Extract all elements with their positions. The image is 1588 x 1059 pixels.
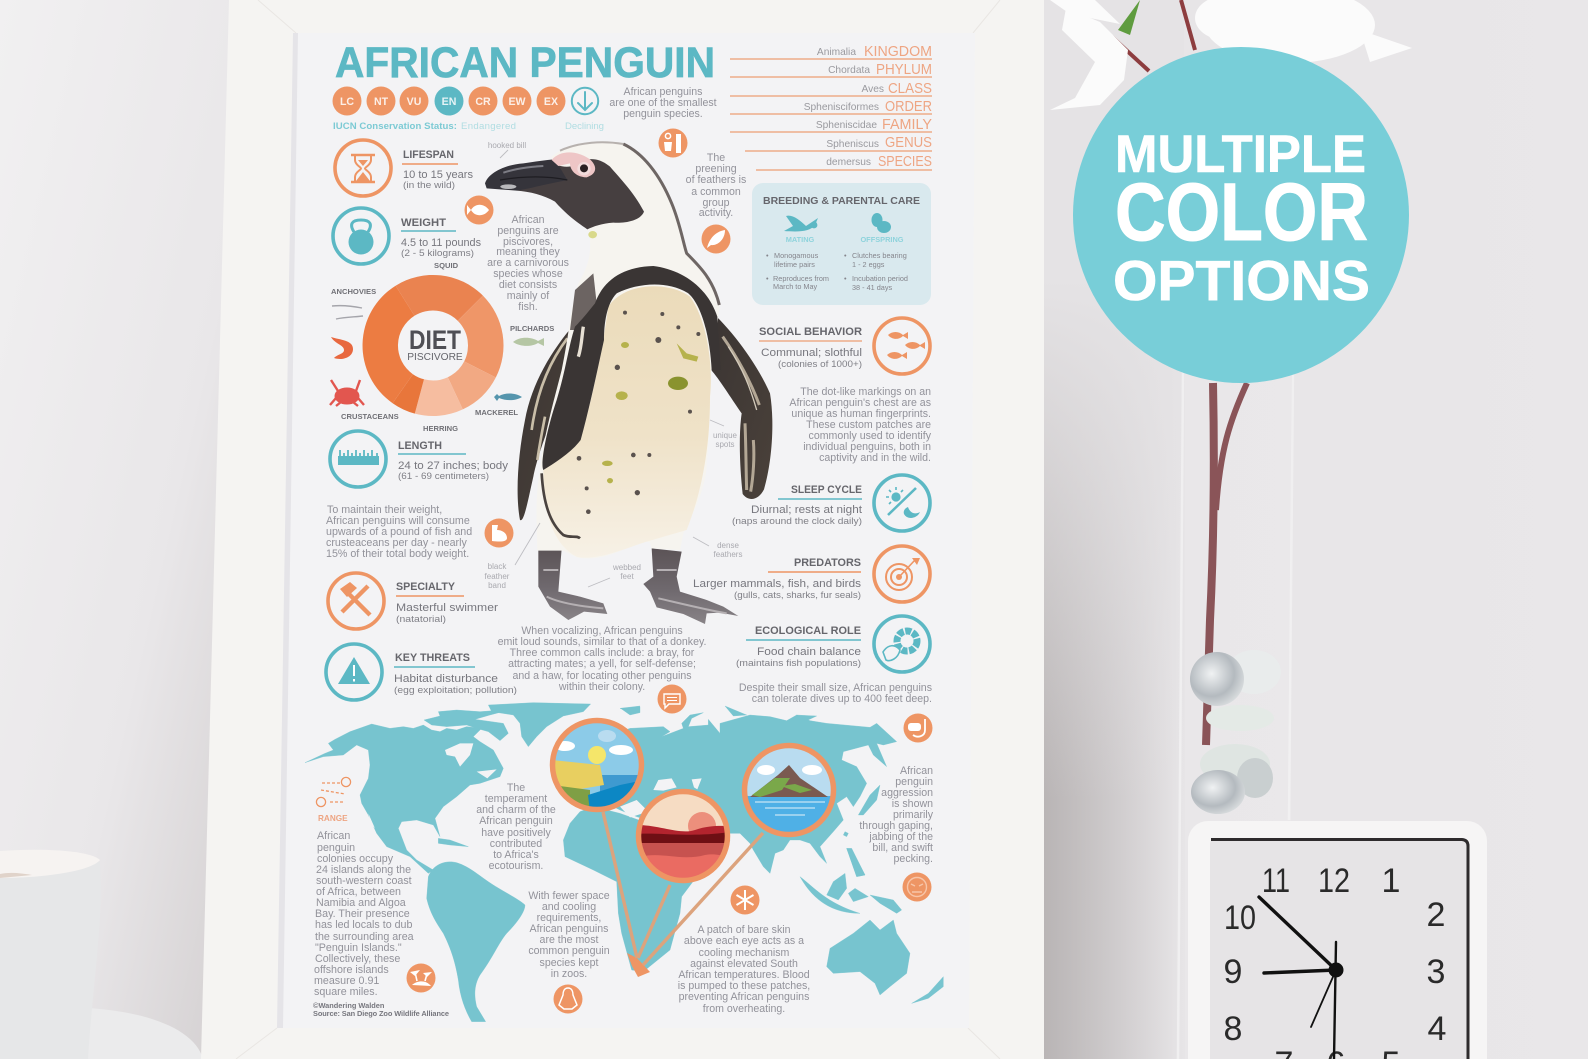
text: vocalizing: within their colony.	[558, 681, 645, 693]
predators block: Larger mammals, fish, and birds	[693, 578, 861, 590]
text: dives	[739, 682, 932, 705]
text: range: has led locals to dub	[315, 919, 412, 931]
range marker: South Africa	[627, 953, 650, 977]
text: zoos: common penguin	[528, 945, 610, 957]
text: zoos: African penguins	[530, 923, 608, 935]
legs and feet	[538, 548, 738, 624]
badge: multiple color options: MULTIPLE	[1115, 125, 1366, 184]
ring: desert sunset	[638, 792, 728, 880]
clock	[1188, 821, 1487, 1059]
clock numerals: 1	[1382, 862, 1400, 900]
specialty text: SPECIALTY	[396, 581, 456, 593]
breeding bullets: lifetime pairs	[774, 260, 815, 269]
left flipper	[518, 323, 575, 520]
back edge shading	[623, 144, 719, 305]
text: range	[314, 830, 414, 998]
icon: sun and moon	[874, 475, 930, 531]
clock numerals	[1224, 862, 1446, 1059]
text: vocalizing: attracting mates; a yell, for self-defense;	[508, 658, 696, 670]
breeding bullets: •	[844, 274, 847, 283]
icon: hammer and wrench	[328, 573, 384, 629]
chest spots	[577, 311, 700, 514]
text: eye patch: A patch of bare skin	[697, 924, 791, 936]
icon: anchovies	[332, 306, 363, 319]
text: preening: The	[707, 152, 725, 164]
weight text: WEIGHT	[401, 217, 446, 229]
text: vocalizing: emit loud sounds, similar to that of a donkey.	[498, 636, 706, 648]
text: chest markings: The dot-like markings on an	[800, 386, 931, 398]
sleep cycle block	[732, 475, 930, 531]
icon: angry face	[902, 872, 932, 902]
text: maintain weight: 15% of their total body weight.	[326, 548, 469, 560]
text: eye patch: preventing African penguins	[679, 991, 809, 1003]
text: eye patch: African temperatures. Blood	[678, 969, 810, 981]
predators block: (gulls, cats, sharks, fur seals)	[734, 589, 861, 600]
icon: snowflake	[730, 886, 760, 914]
text: piscivores: fish.	[518, 301, 538, 313]
text: aggression	[859, 765, 934, 865]
conservation status badges: LC	[340, 96, 354, 108]
text: vocalizing: and a haw, for locating other penguins	[512, 670, 692, 682]
penguin annotations: feet	[620, 572, 634, 581]
text: preening: group	[702, 197, 730, 209]
text: range: 24 islands along the	[316, 864, 411, 876]
diet centre label: DIET	[409, 325, 461, 355]
icon: fish school	[874, 318, 930, 374]
diet labels: HERRING	[423, 424, 458, 433]
icon: muscle arm	[484, 518, 514, 548]
breeding bullets: •	[766, 274, 769, 283]
map: africa and australasia	[563, 807, 943, 1003]
scene: desert sunset	[641, 794, 725, 878]
penguin annotations	[485, 141, 742, 590]
text: range: the surrounding area	[315, 931, 414, 943]
glass stones	[1190, 650, 1281, 814]
key threats block: Habitat disturbance	[394, 673, 498, 685]
lifespan block: 10 to 15 years	[403, 169, 473, 181]
icon: pilchard	[513, 338, 544, 346]
taxonomy list: GENUS	[885, 134, 932, 151]
text: aggression: primarily	[893, 809, 934, 821]
icon: ruler	[330, 431, 386, 487]
clock numerals: 2	[1427, 896, 1445, 934]
diet labels: MACKEREL	[475, 408, 518, 417]
text: preening: preening	[695, 163, 737, 175]
text: preening	[686, 152, 746, 219]
text: ecotourism: and charm of the	[476, 804, 556, 816]
text: piscivores: piscivores,	[503, 236, 553, 248]
social behavior block: (colonies of 1000+)	[778, 358, 862, 369]
lifespan block: (in the wild)	[403, 179, 455, 190]
text: eye patch	[678, 924, 810, 1015]
text: zoos: are the most	[540, 934, 598, 946]
text: piscivores: mainly of	[507, 290, 549, 302]
social behavior text: SOCIAL BEHAVIOR	[759, 326, 862, 338]
poster paper	[277, 33, 975, 1028]
penguin annotations: black	[488, 562, 507, 571]
diet labels: SQUID	[434, 261, 459, 270]
icon: gear and leaf	[874, 616, 930, 672]
icon: island	[406, 964, 436, 992]
text: chest markings: unique as human fingerprints.	[791, 408, 931, 420]
green stains	[602, 342, 698, 483]
text: aggression: jabbing of the	[868, 831, 933, 843]
text: chest markings: These custom patches are	[806, 419, 931, 431]
lifespan text: LIFESPAN	[403, 149, 454, 161]
text: preening: of feathers is	[686, 174, 746, 186]
diet labels: PILCHARDS	[510, 324, 554, 333]
clock hands	[1259, 897, 1343, 1059]
breeding bullets: March to May	[773, 282, 818, 291]
conservation status caption: IUCN Conservation Status:	[333, 121, 457, 132]
body	[537, 142, 720, 558]
brow patch	[552, 152, 595, 177]
sleep cycle block: Diurnal; rests at night	[751, 504, 863, 516]
text: range: penguin	[317, 842, 355, 854]
icon: range route	[316, 777, 351, 807]
text: piscivores: meaning they	[496, 246, 561, 258]
vase with stem	[1178, 370, 1293, 1059]
weight block: 4.5 to 11 pounds	[401, 237, 481, 249]
text: maintain weight: crusteaceans per day - nearly	[326, 537, 467, 549]
length block	[330, 431, 508, 487]
clock numerals: 8	[1224, 1010, 1242, 1048]
text: range: south-western coast	[316, 875, 412, 887]
flank feathers	[570, 273, 597, 330]
credits: ©Wandering Walden	[313, 1001, 385, 1010]
breeding bullets: •	[844, 251, 847, 260]
text: chest markings: individual penguins, both in	[803, 441, 931, 453]
text: maintain weight: To maintain their weight,	[327, 504, 442, 516]
weight block	[333, 208, 481, 264]
text: smallest species: African penguins	[624, 86, 702, 98]
picture frame	[201, 0, 1044, 1059]
text: aggression: penguin	[895, 776, 933, 788]
taxonomy list: FAMILY	[882, 116, 932, 133]
icon: fish	[464, 196, 494, 224]
clock numerals: 11	[1262, 862, 1290, 900]
conservation status badges: CR	[475, 96, 491, 108]
text: aggression: through gaping,	[859, 820, 933, 832]
map: south america	[427, 862, 525, 1022]
conservation status caption: Declining	[565, 121, 604, 132]
diet centre label	[407, 325, 463, 363]
badge: multiple color options	[1073, 47, 1409, 383]
length block: 24 to 27 inches; body	[398, 460, 508, 472]
icon: declining arrow	[572, 88, 598, 114]
text: range: Namibia and Algoa	[316, 897, 406, 909]
text: range: measure 0.91	[314, 975, 379, 987]
taxonomy list: Aves	[862, 84, 884, 95]
icon: speech bubble	[658, 684, 686, 714]
Hudson Bay and gulf	[368, 743, 497, 828]
sleep cycle text: SLEEP CYCLE	[791, 484, 862, 496]
predators text: PREDATORS	[794, 557, 861, 569]
text: ecotourism: to Africa's	[493, 849, 539, 861]
icon: stork	[784, 216, 818, 231]
diet labels	[331, 261, 554, 433]
clock numerals: 12	[1318, 862, 1350, 900]
text: aggression: African	[900, 765, 933, 777]
text: maintain weight: African penguins will consume	[326, 515, 470, 527]
range label: RANGE	[318, 814, 348, 823]
text: range: square miles.	[314, 986, 378, 998]
text: range: of Africa, between	[316, 886, 401, 898]
map: north america and greenland	[305, 703, 640, 873]
text: aggression: aggression	[881, 787, 933, 799]
taxonomy list: Spheniscidae	[816, 120, 877, 131]
credits: Source: San Diego Zoo Wildlife Alliance	[313, 1009, 449, 1018]
icon: shrimp	[331, 337, 353, 359]
specialty block	[328, 573, 498, 629]
lifespan block	[335, 140, 473, 196]
chest band	[542, 266, 721, 470]
specialty block: (natatorial)	[396, 613, 446, 624]
chart: diet donut	[330, 261, 554, 433]
mating and offspring labels: OFFSPRING	[860, 235, 904, 244]
title: AFRICAN PENGUIN	[335, 39, 715, 87]
eye	[577, 162, 591, 175]
text: aggression: pecking.	[894, 853, 933, 865]
icon: target	[874, 546, 930, 602]
taxonomy list: Animalia	[817, 47, 856, 58]
social behavior block	[759, 318, 930, 374]
cup and saucer	[0, 850, 203, 1059]
key threats block	[326, 644, 517, 700]
text: eye patch: is pumped to these patches,	[678, 980, 810, 992]
conservation status badges: EW	[508, 96, 526, 108]
taxonomy list: Spheniscus	[826, 139, 879, 150]
taxonomy list: Chordata	[828, 65, 870, 76]
text: eye patch: against elevated South	[690, 958, 798, 970]
sleep cycle block: (naps around the clock daily)	[732, 515, 862, 526]
right flipper	[711, 317, 772, 499]
text: preening: a common	[691, 186, 741, 198]
clock numerals: 10	[1224, 899, 1256, 937]
penguin annotations: hooked bill	[488, 141, 526, 150]
taxonomy list: SPECIES	[878, 153, 932, 170]
text: range: offshore islands	[314, 964, 389, 976]
taxonomy list: KINGDOM	[864, 43, 932, 60]
text: eye patch: above each eye acts as a	[684, 935, 804, 947]
penguin annotations: webbed	[612, 563, 641, 572]
predators block	[693, 546, 930, 602]
taxonomy list: PHYLUM	[876, 61, 932, 78]
panel: breeding and parental care	[752, 183, 931, 305]
conservation status badges	[332, 86, 566, 116]
badge: multiple color options: OPTIONS	[1113, 249, 1370, 313]
text: zoos: in zoos.	[551, 968, 587, 980]
text: zoos	[528, 890, 610, 980]
text: ecotourism: have positively	[481, 827, 551, 839]
diet labels: ANCHOVIES	[331, 287, 376, 296]
icon: mackerel	[494, 393, 522, 401]
penguin annotations: feathers	[714, 550, 742, 559]
text: chest markings: African penguin's chest are as	[789, 397, 931, 409]
text: ecotourism: ecotourism.	[489, 860, 543, 872]
weight block: (2 - 5 kilograms)	[401, 247, 474, 258]
belly	[543, 286, 711, 558]
length text: LENGTH	[398, 440, 442, 452]
icon: warning triangle	[326, 644, 382, 700]
diet labels: CRUSTACEANS	[341, 412, 399, 421]
diet centre label: PISCIVORE	[407, 352, 463, 363]
text: chest markings	[789, 386, 932, 464]
text: zoos: species kept	[540, 957, 598, 969]
taxonomy list: ORDER	[885, 98, 932, 115]
badge: multiple color options: COLOR	[1115, 167, 1368, 258]
ring: island	[744, 746, 834, 834]
scene: coastal cliff	[555, 723, 639, 807]
text: piscivores: diet consists	[499, 279, 557, 291]
text: range: Collectively, these	[315, 953, 400, 965]
text: smallest species: penguin species.	[623, 108, 703, 120]
text: eye patch: cooling mechanism	[699, 947, 790, 959]
penguin annotations: feather	[485, 572, 510, 581]
conservation status badges: EN	[442, 96, 456, 108]
penguin illustration	[485, 142, 772, 624]
icon: feather	[702, 224, 730, 254]
text: piscivores: African	[512, 214, 545, 226]
icon: height	[658, 128, 688, 158]
ecological role text: ECOLOGICAL ROLE	[755, 625, 861, 637]
specialty block: Masterful swimmer	[396, 602, 498, 614]
inland seas	[620, 778, 702, 817]
text: smallest species: are one of the smallest	[609, 97, 717, 109]
text: piscivores: penguins are	[497, 225, 559, 237]
ring: coastal cliff	[552, 720, 642, 810]
conservation status caption	[333, 121, 604, 132]
penguin annotations: dense	[717, 541, 739, 550]
text: ecotourism: The	[507, 782, 525, 794]
breeding heading: BREEDING & PARENTAL CARE	[763, 196, 920, 207]
breeding bullets	[766, 251, 908, 292]
taxonomy list: Sphenisciformes	[804, 102, 879, 113]
icon: kettlebell	[333, 208, 389, 264]
mating and offspring labels: MATING	[786, 235, 815, 244]
text: range: "Penguin Islands."	[315, 942, 402, 954]
key threats text: KEY THREATS	[395, 652, 470, 664]
text: zoos: requirements,	[537, 912, 601, 924]
penguin annotations: band	[488, 581, 506, 590]
icon: crab	[330, 380, 364, 406]
mating and offspring labels	[786, 235, 904, 244]
text: range: Bay. Their presence	[315, 908, 410, 920]
penguin annotations: spots	[715, 440, 735, 449]
map: eurasia	[600, 706, 897, 877]
penguin annotations: unique	[713, 431, 738, 440]
conservation status badges: NT	[374, 96, 389, 108]
scene: island	[747, 748, 831, 832]
clock numerals: 4	[1428, 1010, 1446, 1048]
text: chest markings: commonly used to identify	[809, 430, 932, 442]
credits	[313, 1001, 449, 1018]
text: ecotourism: contributed	[490, 838, 542, 850]
text: vocalizing	[498, 625, 706, 693]
face	[517, 159, 644, 229]
text: ecotourism	[476, 782, 556, 872]
text: maintain weight	[326, 504, 472, 560]
text: ecotourism: temperament	[485, 793, 547, 805]
text: smallest species	[609, 86, 717, 120]
text: dives: Despite their small size, African penguins	[739, 682, 932, 694]
clock numerals: 9	[1224, 953, 1242, 991]
text: aggression: bill, and swift	[872, 842, 933, 854]
text: maintain weight: upwards of a pound of fish and	[326, 526, 472, 538]
breeding bullets: 38 - 41 days	[852, 283, 893, 292]
breeding bullets: Clutches bearing	[852, 251, 907, 260]
text: zoos: and cooling	[542, 901, 596, 913]
length block: (61 - 69 centimeters)	[398, 470, 489, 481]
text: eye patch: from overheating.	[703, 1003, 785, 1015]
text: preening: activity.	[699, 207, 733, 219]
text: ecotourism: African penguin	[479, 815, 553, 827]
icon: eggs	[872, 213, 891, 233]
breeding bullets: Reproduces from	[773, 274, 829, 283]
text: vocalizing: When vocalizing, African penguins	[521, 625, 683, 637]
conservation status badges: VU	[407, 96, 421, 108]
icon: hourglass	[335, 140, 391, 196]
breeding bullets: Monogamous	[774, 251, 819, 260]
icon: snorkel	[904, 714, 932, 742]
world map	[305, 703, 943, 1022]
taxonomy list: CLASS	[888, 80, 932, 97]
social behavior block: Communal; slothful	[761, 347, 862, 359]
taxonomy list	[730, 43, 932, 170]
beak	[485, 159, 567, 191]
ecological role block: (maintains fish populations)	[736, 657, 861, 668]
ecological role block	[736, 616, 930, 672]
key threats block: (egg exploitation; pollution)	[394, 684, 517, 695]
ecological role block: Food chain balance	[757, 646, 861, 658]
conservation status caption: Endangered	[461, 121, 516, 132]
text: vocalizing: Three common calls include: a bray, for	[510, 647, 695, 659]
breeding bullets: Incubation period	[852, 274, 908, 283]
callout lines	[603, 812, 763, 965]
text: zoos: With fewer space	[528, 890, 610, 902]
breeding bullets: 1 - 2 eggs	[852, 260, 885, 269]
clock numerals: 3	[1427, 953, 1445, 991]
text: aggression: is shown	[892, 798, 933, 810]
taxonomy list: demersus	[826, 157, 871, 168]
text: piscivores	[487, 214, 569, 313]
breeding bullets: •	[766, 251, 769, 260]
flowers	[1050, 0, 1412, 110]
text: range: colonies occupy	[317, 853, 394, 865]
text: dives: can tolerate dives up to 400 feet deep.	[752, 693, 932, 705]
throat mark	[588, 231, 597, 238]
icon: small penguin	[554, 984, 582, 1014]
text: chest markings: captivity and in the wild.	[819, 452, 931, 464]
text: piscivores: are a carnivorous	[487, 257, 569, 269]
text: piscivores: species whose	[493, 268, 563, 280]
conservation status badges: EX	[544, 96, 558, 108]
text: range: African	[317, 830, 350, 842]
